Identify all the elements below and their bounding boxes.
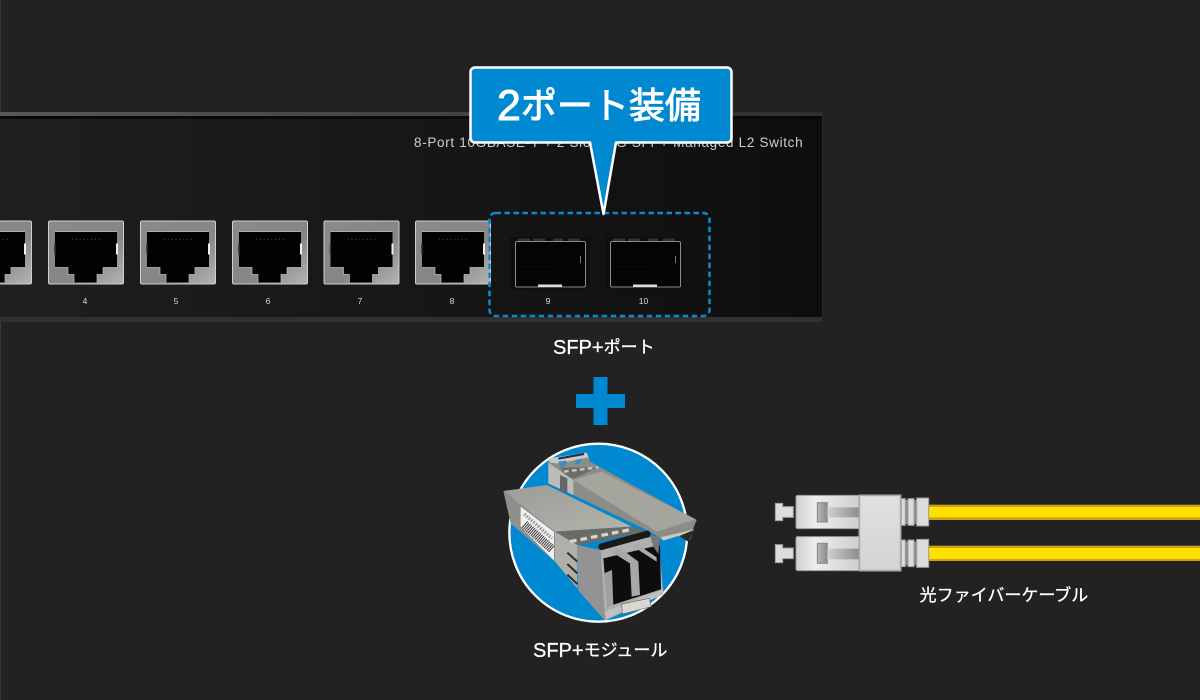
connector lower <box>775 537 929 571</box>
port 5 <box>140 221 216 284</box>
port 4 <box>48 221 124 284</box>
dashed highlight around SFP+ ports <box>490 213 710 316</box>
label: fiber cable: 光ファイバーケーブル <box>920 585 1088 605</box>
blue circle <box>509 444 687 622</box>
port numbers <box>83 296 648 306</box>
barcode label <box>521 507 554 561</box>
SFP+ port 10 <box>605 237 685 289</box>
label: SFP+ port: SFP+ <box>553 337 604 359</box>
callout text: ポート装備 <box>521 85 701 126</box>
port numbers: 5 <box>174 296 179 306</box>
icon: plus <box>576 377 625 425</box>
label: SFP+ module: モジュール <box>584 641 667 660</box>
connector shared housing <box>859 495 901 571</box>
port numbers: 10 <box>639 296 648 306</box>
yellow cable upper <box>928 505 1200 520</box>
connector upper <box>775 495 929 529</box>
port numbers: 9 <box>546 296 551 306</box>
port numbers: 7 <box>358 296 363 306</box>
network switch <box>0 112 823 322</box>
callout bubble <box>470 68 732 214</box>
port numbers: 8 <box>450 296 455 306</box>
yellow cable lower <box>928 546 1200 561</box>
port numbers: 6 <box>266 296 271 306</box>
switch top edge <box>0 112 823 119</box>
label: SFP+ module: SFP+ <box>533 640 584 662</box>
SFP+ module illustration <box>503 444 697 622</box>
back module <box>548 453 697 542</box>
port 6 <box>232 221 308 284</box>
callout: 2 ports <box>470 68 732 214</box>
port 3 <box>0 221 32 284</box>
callout text: 2 <box>497 82 521 130</box>
label: SFP+ port: ポート <box>604 338 655 357</box>
port 7 <box>324 221 399 284</box>
port 8 <box>416 221 490 284</box>
switch front panel <box>0 119 822 318</box>
model text: 8-Port 10GBASE-T + 2 Slot 10G SFP+ Managed L2 Switch <box>414 135 803 150</box>
port numbers: 4 <box>83 296 88 306</box>
front face <box>600 536 663 621</box>
SFP+ port 9 <box>510 237 590 289</box>
switch bottom edge <box>0 317 822 322</box>
fiber optic cable <box>775 495 1200 571</box>
front module <box>503 485 663 621</box>
